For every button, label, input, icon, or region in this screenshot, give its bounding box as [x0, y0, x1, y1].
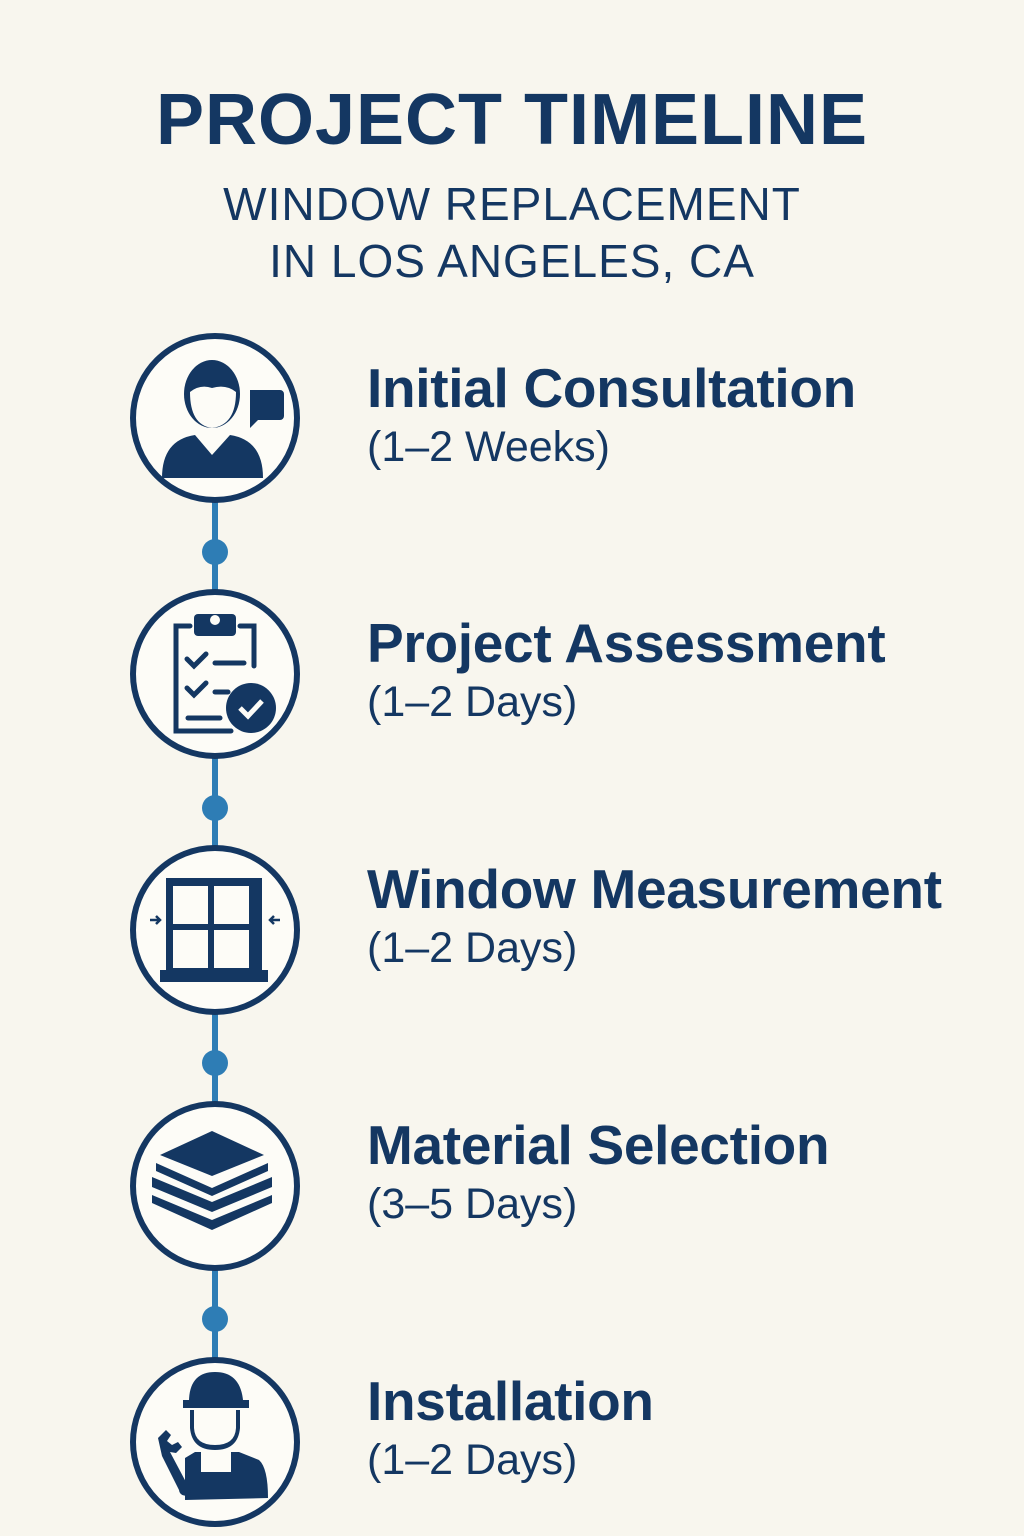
- subtitle: [223, 178, 801, 287]
- icon: consultant: [162, 360, 284, 478]
- title: PROJECT TIMELINE: [156, 80, 868, 160]
- step 1 text: [367, 357, 856, 471]
- step 3 text: (1–2 Days): [367, 924, 577, 972]
- step 2 text: (1–2 Days): [367, 678, 577, 726]
- step 4 text: (3–5 Days): [367, 1180, 577, 1228]
- step 5 text: Installation: [367, 1370, 654, 1432]
- step 3 text: [367, 858, 942, 972]
- step 1 text: (1–2 Weeks): [367, 423, 610, 471]
- step 5 text: [367, 1370, 654, 1484]
- subtitle: IN LOS ANGELES, CA: [269, 235, 755, 287]
- step 1 text: Initial Consultation: [367, 357, 856, 419]
- subtitle: WINDOW REPLACEMENT: [223, 178, 801, 230]
- icon: clipboard: [176, 626, 254, 731]
- icon: window: [160, 878, 268, 982]
- step 4 text: Material Selection: [367, 1114, 829, 1176]
- icon: layers: [152, 1131, 272, 1230]
- step 2 text: Project Assessment: [367, 612, 885, 674]
- step 3 text: Window Measurement: [367, 858, 942, 920]
- step 5 text: (1–2 Days): [367, 1436, 577, 1484]
- icon: installer: [158, 1372, 268, 1500]
- step 2 text: [367, 612, 885, 726]
- step 4 text: [367, 1114, 829, 1228]
